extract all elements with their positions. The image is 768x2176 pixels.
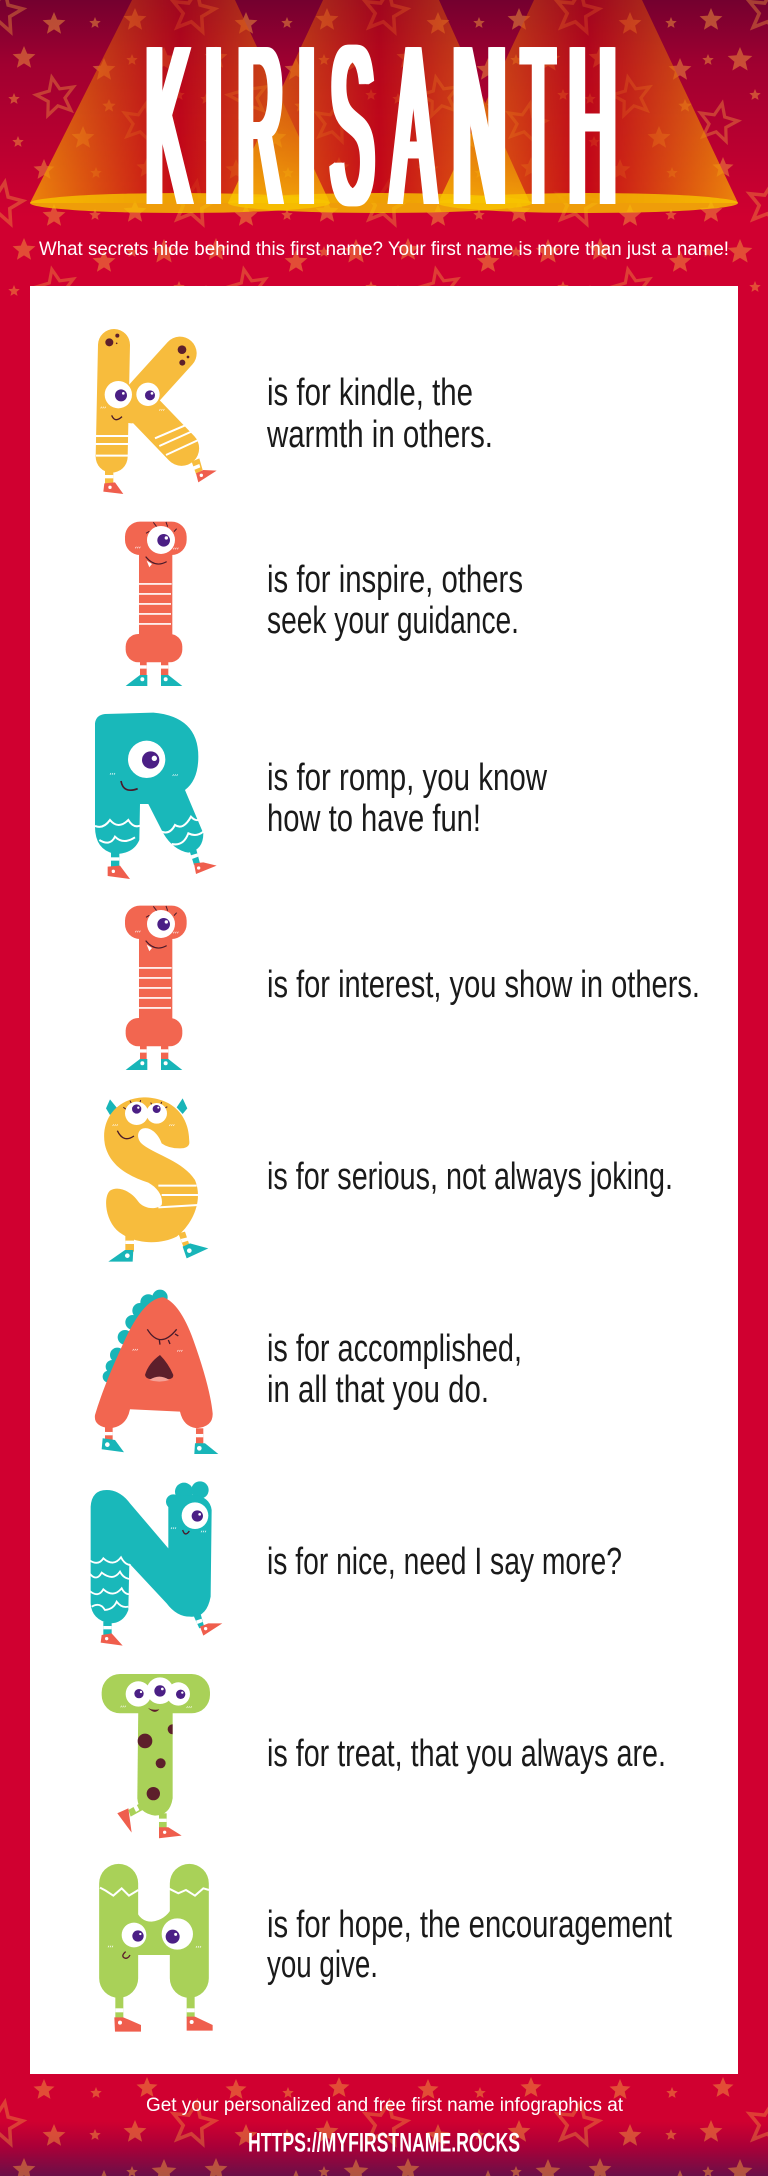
text: K: is for kindle, the xyxy=(267,372,473,414)
title xyxy=(146,0,616,253)
stage spotlights xyxy=(30,0,738,213)
text: K: warmth in others. xyxy=(266,414,493,456)
icon: monster letter N xyxy=(89,1481,222,1646)
icon: monster letter S xyxy=(104,1097,208,1262)
title: A xyxy=(392,0,434,253)
text: H xyxy=(267,1904,672,1986)
title: I xyxy=(298,0,315,253)
panel: white content card xyxy=(30,286,738,2074)
icon: monster letter H xyxy=(100,1883,213,2032)
text: I: seek your guidance. xyxy=(267,600,519,642)
text: A xyxy=(267,1328,522,1411)
text: R xyxy=(267,757,547,840)
text: K xyxy=(266,372,493,456)
title: R xyxy=(238,0,282,253)
icon: monster letter I (second) xyxy=(125,906,187,1070)
title: K xyxy=(146,0,190,253)
title: T xyxy=(522,0,554,253)
title: N xyxy=(453,0,505,253)
title: S xyxy=(331,0,373,253)
text: H: you give. xyxy=(267,1944,378,1986)
title: H xyxy=(569,0,616,253)
title: I xyxy=(205,0,222,253)
icon: monster letter A xyxy=(95,1290,218,1454)
icon: monster letter I xyxy=(125,522,187,686)
text: R: is for romp, you know xyxy=(267,757,547,799)
footer: website url: HTTPS://MYFIRSTNAME.ROCKS xyxy=(248,2128,520,2158)
footer: invitation line: Get your personalized and free first name infographics at xyxy=(146,2095,624,2116)
icon: monster letter R xyxy=(95,713,217,879)
text: I xyxy=(267,559,523,642)
text: R: how to have fun! xyxy=(267,798,481,840)
text: A: is for accomplished, xyxy=(267,1328,522,1370)
text: I: is for inspire, others xyxy=(267,559,523,601)
icon: monster letter T xyxy=(102,1674,210,1838)
text: A: in all that you do. xyxy=(267,1369,489,1411)
subtitle: What secrets hide behind this first name? Your first name is more than just a name! xyxy=(39,238,729,260)
icon: monster letter K xyxy=(95,334,217,494)
text: N: is for nice, need I say more? xyxy=(267,1541,622,1583)
